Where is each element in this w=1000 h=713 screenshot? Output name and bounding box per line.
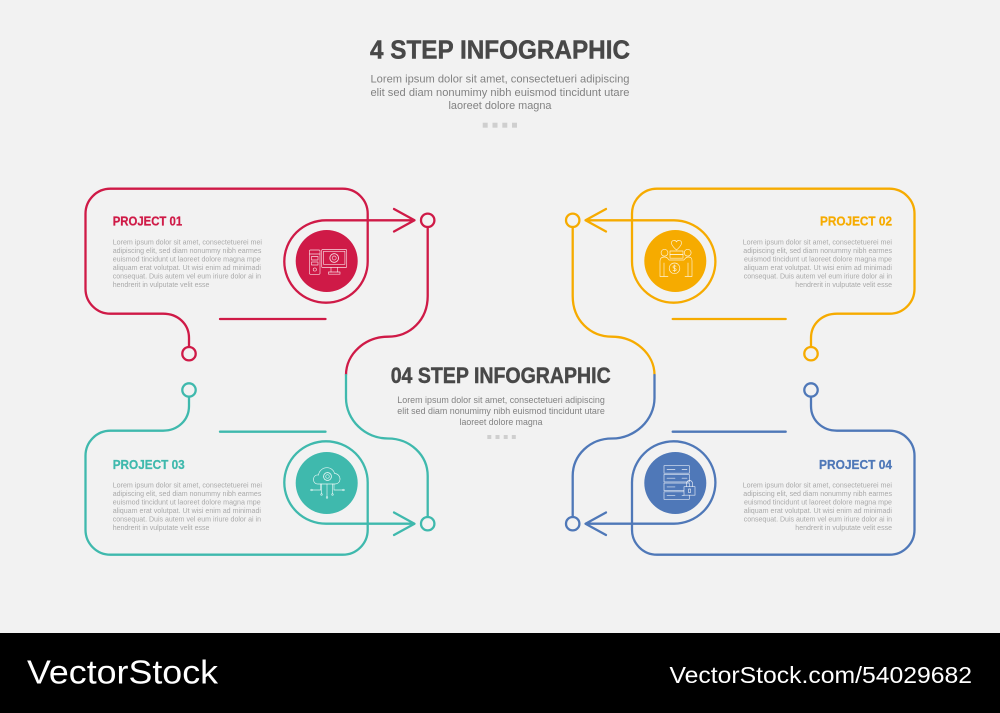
project 02 body text: euismod tincidunt ut laoreet dolore magna mpe — [744, 255, 892, 264]
footer bar — [0, 633, 1000, 713]
yellow icon disc — [644, 230, 706, 292]
project 04 body text: aliquam erat volutpat. Ut wisi enim ad minimadi — [744, 506, 892, 515]
yellow card outline with arrow — [566, 189, 914, 375]
project 03 body text: hendrerit in vulputate velit esse — [113, 523, 209, 532]
project 01 body text: Lorem ipsum dolor sit amet, consectetuerei mei — [113, 238, 262, 247]
project 03 body text: aliquam erat volutpat. Ut wisi enim ad minimadi — [113, 506, 261, 515]
blue card outline with arrow — [566, 375, 914, 555]
project 01 body text: consequat. Duis autem vel eum iriure dolor ai in — [113, 271, 261, 280]
center dots — [487, 435, 516, 439]
teal card outline with arrow — [86, 375, 434, 555]
project 01 body text: hendrerit in vulputate velit esse — [113, 280, 209, 289]
footer url: VectorStock.com/54029682 — [670, 662, 972, 688]
panel: project 02 — [566, 189, 914, 375]
center subtitle — [397, 395, 605, 427]
red card outline with arrow — [86, 189, 434, 375]
center text block — [391, 363, 611, 439]
project 04 body text: Lorem ipsum dolor sit amet, consectetuerei mei — [743, 481, 892, 490]
project 04 body text — [743, 481, 892, 532]
project 02 body text: hendrerit in vulputate velit esse — [795, 280, 892, 289]
project 03 body text — [113, 481, 262, 532]
icon: server with padlock — [664, 466, 695, 499]
project 01 body text: adipiscing elit, sed diam nonummy nibh earmes — [113, 246, 262, 255]
panel: project 04 — [566, 375, 914, 555]
subtitle: laoreet dolore magna — [448, 100, 552, 112]
project 02 body text — [743, 238, 892, 289]
center subtitle: laoreet dolore magna — [460, 417, 543, 427]
project 02 body text: adipiscing elit, sed diam nonummy nibh earmes — [743, 246, 892, 255]
footer brand name: VectorStock — [27, 654, 219, 690]
header block — [370, 34, 630, 128]
project 03 body text: consequat. Duis autem vel eum iriure dolor ai in — [113, 514, 261, 523]
project 01 body text: aliquam erat volutpat. Ut wisi enim ad minimadi — [113, 263, 261, 272]
subtitle: elit sed diam nonumimy nibh euismod tincidunt utare — [370, 87, 630, 99]
project 01 body text: euismod tincidunt ut laoreet dolore magna mpe — [113, 255, 261, 264]
icon: cloud network — [311, 468, 344, 498]
project 03 body text: Lorem ipsum dolor sit amet, consectetuerei mei — [113, 481, 262, 490]
project 04 body text: adipiscing elit, sed diam nonummy nibh earmes — [743, 489, 892, 498]
title: 4 STEP INFOGRAPHIC — [370, 34, 630, 64]
subtitle: Lorem ipsum dolor sit amet, consectetueri adipiscing — [370, 74, 630, 86]
project 03 body text: adipiscing elit, sed diam nonummy nibh earmes — [113, 489, 262, 498]
project 02 body text: Lorem ipsum dolor sit amet, consectetuerei mei — [743, 238, 892, 247]
header dots — [483, 123, 517, 128]
icon: people with heart and coin — [660, 240, 692, 276]
subtitle — [370, 74, 630, 112]
project 01 heading: PROJECT 01 — [113, 215, 182, 229]
project 04 body text: consequat. Duis autem vel eum iriure dolor ai in — [744, 514, 892, 523]
project 02 body text: aliquam erat volutpat. Ut wisi enim ad minimadi — [744, 263, 892, 272]
project 02 heading: PROJECT 02 — [820, 215, 892, 229]
center subtitle: elit sed diam nonumimy nibh euismod tincidunt utare — [397, 406, 605, 416]
teal icon disc — [296, 452, 358, 514]
blue icon disc — [644, 452, 706, 514]
project 03 heading: PROJECT 03 — [113, 458, 185, 472]
project 04 body text: hendrerit in vulputate velit esse — [795, 523, 892, 532]
center title: 04 STEP INFOGRAPHIC — [391, 363, 611, 388]
project 01 body text — [113, 238, 262, 289]
project 03 body text: euismod tincidunt ut laoreet dolore magna mpe — [113, 498, 261, 507]
project 02 body text: consequat. Duis autem vel eum iriure dolor ai in — [744, 271, 892, 280]
icon: computer and gear — [310, 250, 347, 274]
red icon disc — [296, 230, 358, 292]
panel: project 01 — [86, 189, 434, 375]
center subtitle: Lorem ipsum dolor sit amet, consectetueri adipiscing — [397, 395, 605, 405]
panel: project 03 — [86, 375, 434, 555]
project 04 heading: PROJECT 04 — [819, 458, 892, 472]
project 04 body text: euismod tincidunt ut laoreet dolore magna mpe — [744, 498, 892, 507]
